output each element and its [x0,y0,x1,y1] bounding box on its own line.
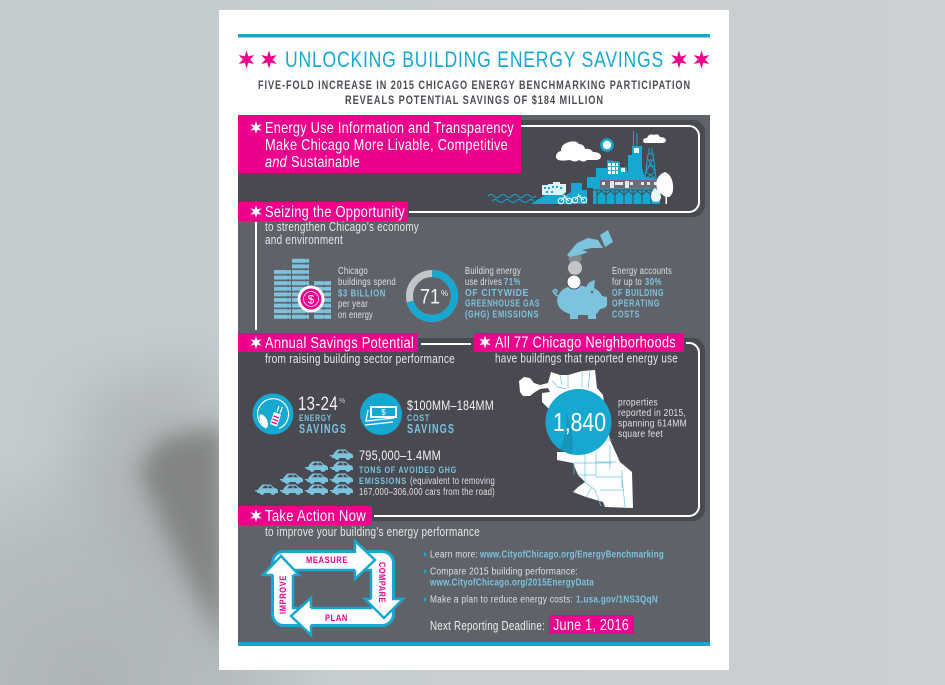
stat: 71 percent emissions [465,266,540,320]
stat: avoided emissions: 167,000–306,000 cars from the road) [359,487,495,498]
banner: annual savings potential [238,333,418,352]
action links list: www.CityofChicago.org/EnergyBenchmarking [479,550,664,560]
icon: money [360,393,402,435]
icon: piggy bank with hand [553,230,613,319]
banner: seizing the opportunity: Seizing the Opportunity [265,204,405,221]
poster sheet [219,10,729,670]
stat: cost savings: $100MM–184MM [407,398,494,413]
next reporting deadline [430,615,634,634]
cycle diagram [263,541,403,635]
banner: energy use information: Sustainable [291,154,360,171]
stat: 71 percent emissions: use drives [465,277,502,288]
callout: 1,840 properties: 1,840 [553,407,606,437]
stat: avoided emissions: (equivalent to removing [410,476,495,487]
neighborhoods subheading: have buildings that reported energy use [495,352,678,366]
stat: 30 percent costs: COSTS [612,308,640,320]
main panel [238,115,710,646]
properties text: reported in 2015, [618,408,686,419]
arrow: plan [291,598,311,635]
action links list: 1.usa.gov/1NS3QqN [576,594,658,606]
label: measure: MEASURE [306,555,348,566]
stat: 30 percent costs: Energy accounts [612,266,672,277]
arrow: measure [355,541,375,579]
action links list [424,550,664,606]
icon: rows of cars [255,450,353,495]
stat: cost savings: SAVINGS [407,422,455,436]
banner: annual savings potential: Annual Savings Potential [265,335,414,352]
stat: energy savings: 13-24 [298,394,338,415]
stat: 71 percent emissions: GREENHOUSE GAS [465,298,540,310]
seizing subheading: and environment [265,233,343,247]
banner: take action now: Take Action Now [265,508,366,525]
arrow: compare [365,599,403,618]
icon: money: $ [381,408,386,417]
stat: 30 percent costs: for up to [612,277,642,288]
label: improve: IMPROVE [278,575,289,614]
stat: cost savings [407,398,494,436]
seizing subheading [265,220,419,247]
banner: all 77 neighborhoods: All 77 Chicago Neighborhoods [495,334,676,352]
label: compare: COMPARE [376,562,387,603]
banner: energy use information: Energy Use Information and Transparency [265,120,514,137]
stat: 3 billion: Chicago [338,266,368,277]
next reporting deadline: June 1, 2016 [553,617,629,634]
action links list: www.CityofChicago.org/2015EnergyData [429,578,594,588]
chart: 71 percent donut: 71 [420,286,440,308]
properties text: square feet [618,429,663,440]
stat: 71 percent emissions: OF CITYWIDE [465,287,529,299]
action links list: Make a plan to reduce energy costs: [430,594,573,606]
properties text: spanning 614MM [618,418,687,430]
subtitle: REVEALS POTENTIAL SAVINGS OF $184 MILLION [345,95,604,107]
action links list: Compare 2015 building performance: [430,566,578,578]
stat: energy savings: SAVINGS [299,422,347,436]
take action subheading: to improve your building's energy performance [265,525,480,539]
stat: cost savings: COST [407,413,430,424]
stat: 3 billion: $3 BILLION [338,288,386,300]
banner: energy use information: and [265,154,288,171]
stat: 30 percent costs: 30% [645,276,662,288]
label: plan: PLAN [325,613,348,624]
annual savings subheading: from raising building sector performance [265,352,455,366]
stat: 71 percent emissions: 71% [504,276,521,288]
stat: avoided emissions: TONS OF AVOIDED GHG [359,465,457,476]
properties text [618,398,687,440]
stat: 3 billion: on energy [338,310,373,321]
arrow: improve [263,556,299,575]
callout: 1,840 properties [546,389,612,455]
chart: 71 percent donut [410,274,454,318]
connector lines [256,126,699,516]
seizing subheading: to strengthen Chicago's economy [265,220,419,234]
stat: 30 percent costs: OPERATING [612,298,660,310]
stat: avoided emissions: 795,000–1.4MM [359,448,441,463]
subtitle [258,80,691,107]
properties text: properties [618,398,658,408]
stat: 3 billion [338,266,396,321]
banner: take action now [238,506,372,525]
chart: 71 percent donut: % [441,289,448,298]
stat: 71 percent emissions: (GHG) EMISSIONS [465,308,539,320]
icon: coin stacks: $ [308,292,315,306]
stat: energy savings [298,394,347,436]
stat: 30 percent costs [612,266,672,320]
stat: 3 billion: buildings spend [338,277,396,288]
banner: seizing the opportunity [238,202,408,221]
stat: avoided emissions [359,448,495,498]
icon: plug [252,394,294,434]
skyline illustration [488,131,673,204]
stat: avoided emissions: EMISSIONS [359,476,407,487]
banner: energy use information [238,115,521,173]
stat: 30 percent costs: OF BUILDING [612,287,664,299]
next reporting deadline: Next Reporting Deadline: [430,619,545,633]
icon: coin stacks [274,258,331,319]
stat: 3 billion: per year [338,299,368,310]
title with stars: UNLOCKING BUILDING ENERGY SAVINGS [285,47,664,72]
chicago neighborhoods map [519,370,633,508]
action links list: Learn more: [430,550,478,560]
banner: energy use information: Make Chicago More Livable, Competitive [265,137,508,154]
stat: energy savings: % [339,398,345,405]
subtitle: FIVE-FOLD INCREASE IN 2015 CHICAGO ENERGY BENCHMARKING PARTICIPATION [258,80,691,92]
stat: 71 percent emissions: Building energy [465,266,521,277]
stat: energy savings: ENERGY [299,413,332,424]
